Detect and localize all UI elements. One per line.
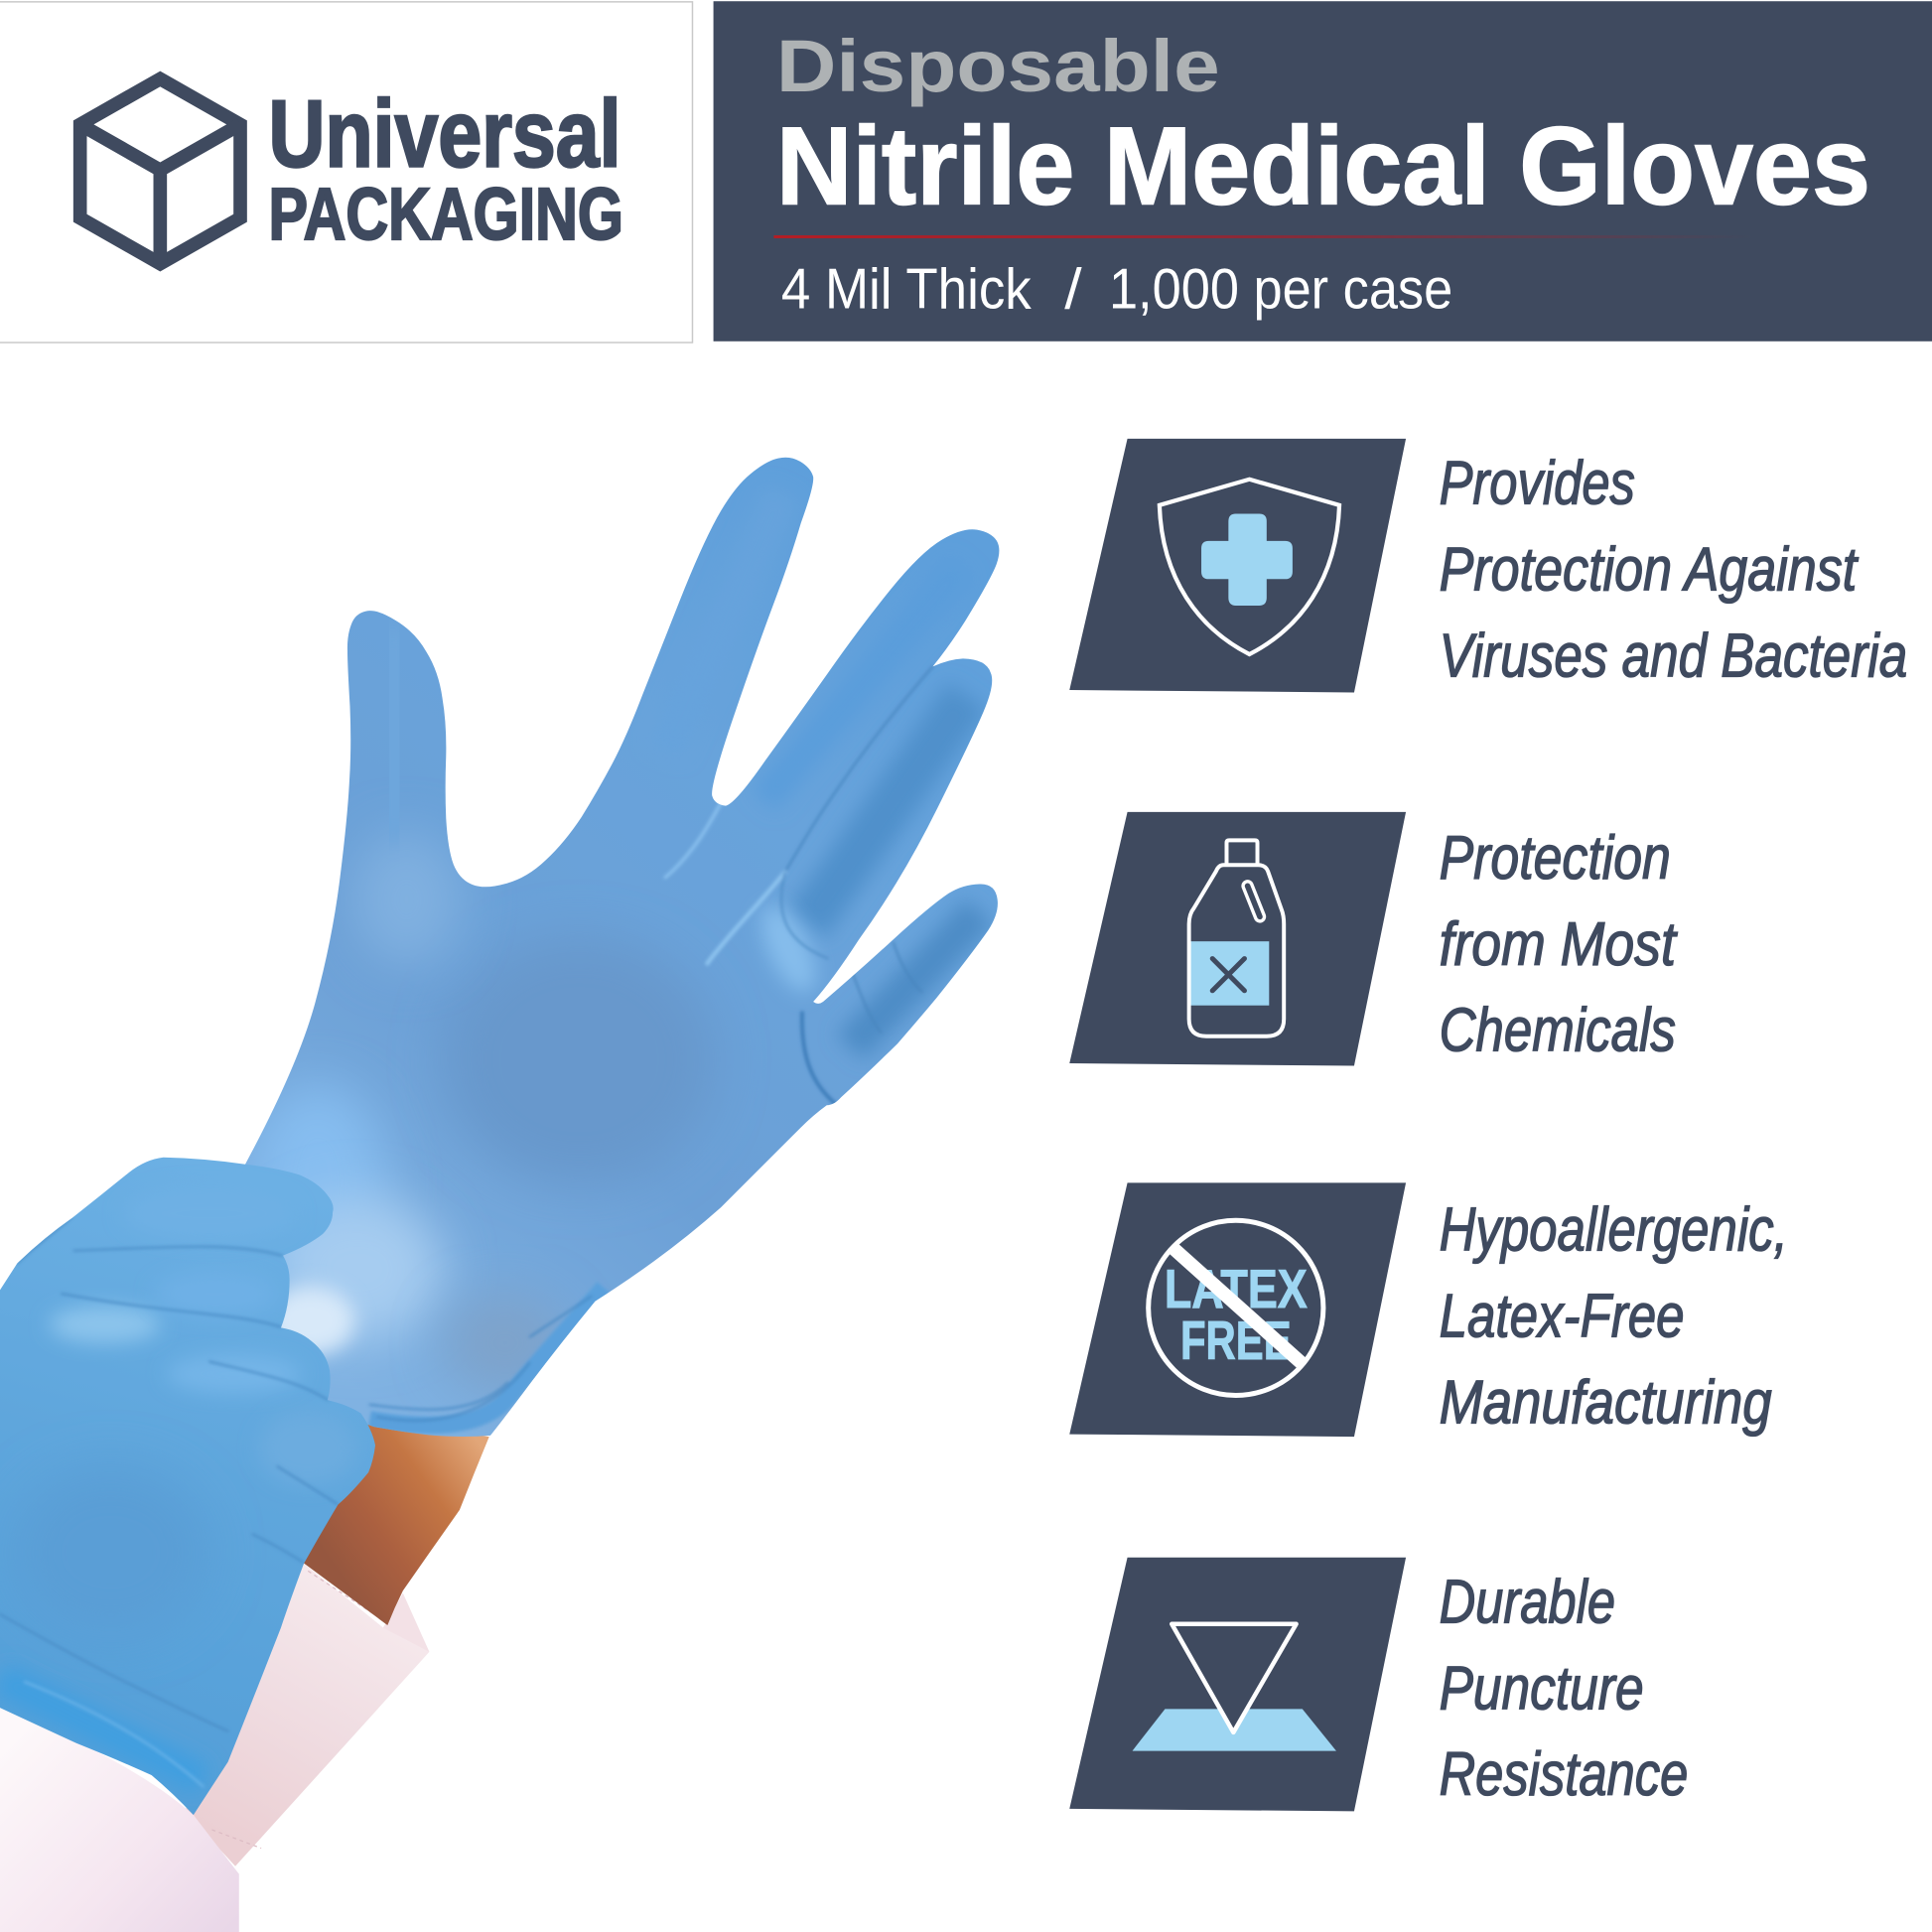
icon panel: puncture <box>1069 1558 1406 1811</box>
feature text: durable: Resistance <box>1440 1740 1688 1809</box>
panel: title header <box>714 1 1932 342</box>
red divider <box>773 235 1753 238</box>
feature text: chemicals <box>1440 824 1678 1065</box>
feature text: durable: Durable <box>1440 1568 1615 1636</box>
icon: shield with cross <box>1160 480 1339 654</box>
feature text: durable: Puncture <box>1440 1654 1644 1723</box>
feature text: chemicals: Protection <box>1440 824 1671 893</box>
feature text: chemicals: Chemicals <box>1440 997 1676 1065</box>
feature text: hypoallergenic: Hypoallergenic, <box>1440 1196 1788 1265</box>
feature text: hypoallergenic: Manufacturing <box>1440 1368 1772 1437</box>
bare wrist <box>300 1417 489 1625</box>
glove creases <box>369 666 932 1421</box>
feature: chemical protection <box>1069 812 1678 1066</box>
left glove hand <box>0 1146 388 1818</box>
outer sleeve <box>0 1708 239 1932</box>
feature text: protection against viruses <box>1440 450 1907 690</box>
subtitle: Disposable: Disposable <box>776 25 1220 107</box>
feature text: protection against viruses: Protection Against <box>1440 535 1860 604</box>
left glove folds <box>0 1217 338 1787</box>
main glove hand <box>221 444 1023 1442</box>
feature: latex free <box>1069 1182 1788 1437</box>
feature: virus and bacteria protection <box>1069 439 1907 692</box>
spec: thickness: 4 Mil Thick <box>781 257 1032 321</box>
icon panel: latex free <box>1069 1182 1406 1437</box>
feature text: hypoallergenic <box>1440 1196 1788 1437</box>
brand name: Universal: Universal <box>269 81 621 188</box>
sleeve inner cuff <box>185 1560 429 1866</box>
brand name: PACKAGING: PACKAGING <box>269 173 623 255</box>
feature text: durable <box>1440 1568 1688 1809</box>
feature text: chemicals: from Most <box>1440 910 1678 979</box>
illustration: gloved hands <box>0 444 1023 1932</box>
feature text: protection against viruses: Provides <box>1440 450 1635 518</box>
icon: latex free badge: LATEX <box>1165 1259 1308 1319</box>
panel: logo header <box>0 2 692 343</box>
icon panel: bottle <box>1069 812 1406 1066</box>
title: Nitrile Medical Gloves: Nitrile Medical Gloves <box>776 103 1870 227</box>
icon: puncture triangle on surface <box>1133 1624 1336 1751</box>
icon: chemical bottle <box>1189 840 1284 1036</box>
spec: case quantity: 1,000 per case <box>1109 257 1452 321</box>
feature: puncture resistance <box>1069 1558 1688 1811</box>
icon: latex free badge: FREE <box>1180 1311 1292 1371</box>
icon: package cube logo <box>80 78 240 264</box>
icon: latex free badge <box>1149 1220 1323 1396</box>
feature text: hypoallergenic: Latex-Free <box>1440 1283 1685 1351</box>
icon panel: shield <box>1069 439 1406 692</box>
spec: separator: / <box>1064 257 1082 321</box>
